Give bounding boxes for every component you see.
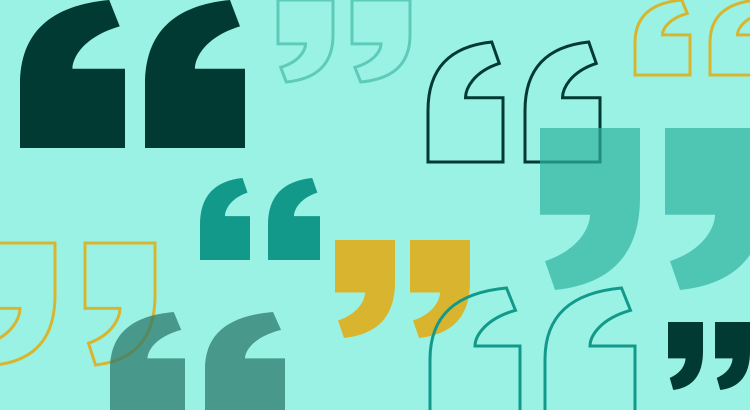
quote: big translucent teal closing quote [540, 128, 750, 290]
quote: gold outline opening quote top-right [635, 0, 750, 75]
quote: teal filled opening quote [200, 178, 320, 260]
quote: dark outline opening quote [428, 42, 600, 162]
quote: teal outline opening quote bottom [430, 288, 635, 410]
quote: gold filled closing quote [335, 240, 470, 338]
quote: gray-green translucent opening quote bottom [110, 312, 285, 410]
quote: gold outline closing quote left [0, 243, 155, 365]
quote: small dark closing quote bottom-right [668, 322, 750, 390]
quote: light teal outline closing quote top [278, 0, 410, 82]
quote: dark filled opening quote top-left [20, 0, 245, 148]
